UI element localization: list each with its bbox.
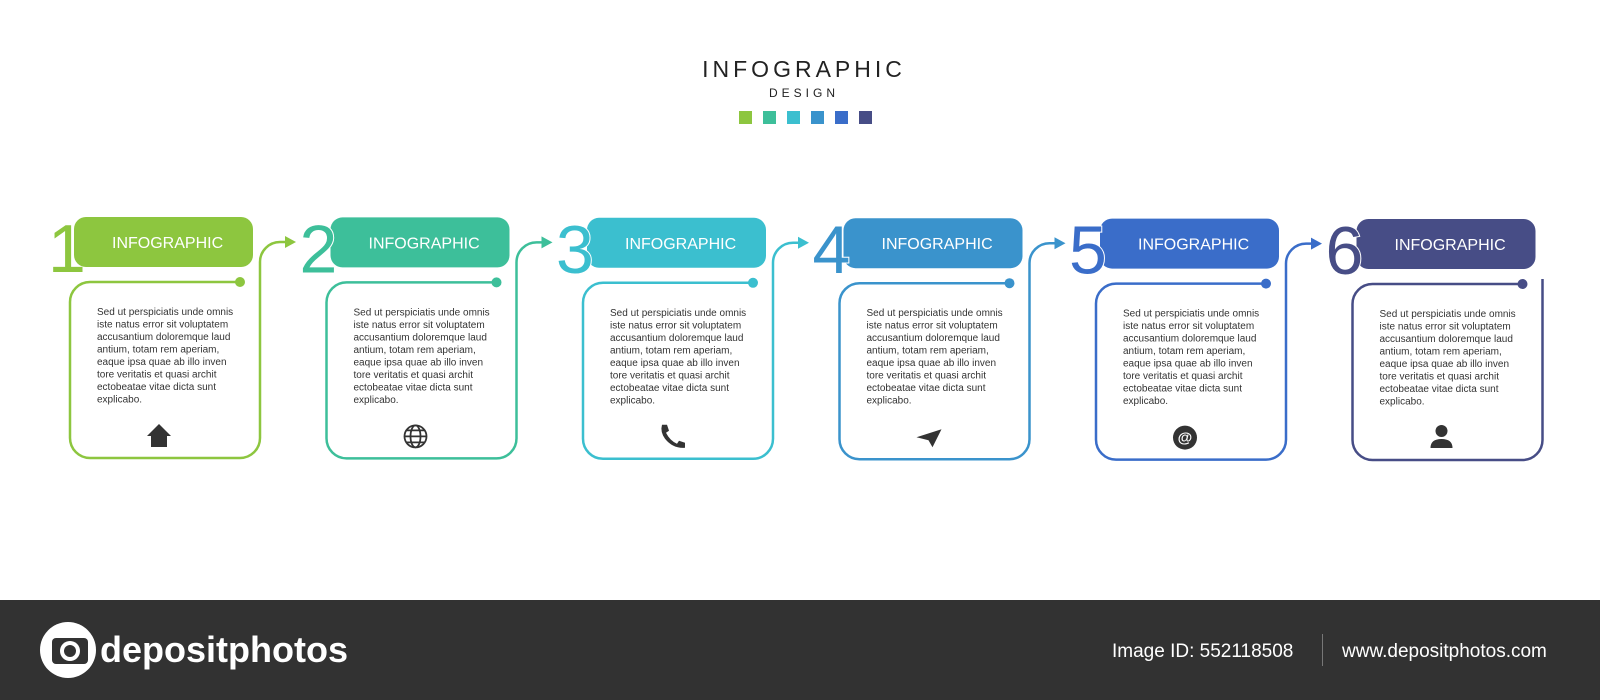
title: [702, 56, 906, 124]
step 4: INFOGRAPHIC: [882, 236, 993, 253]
logo: depositphotos: [100, 629, 348, 670]
footer band: [0, 600, 1600, 700]
step 2: INFOGRAPHIC: [368, 235, 480, 252]
step 4: [812, 212, 1066, 459]
step 1: 1: [48, 211, 86, 287]
step 3: 3: [556, 212, 594, 288]
step 5: [1069, 213, 1322, 460]
footer band: www.depositphotos.com: [1341, 641, 1547, 662]
logo: [40, 622, 348, 678]
icon: at sign: [1173, 426, 1197, 450]
image id: Image ID: 552118508: [1112, 641, 1293, 662]
title: INFOGRAPHIC: [702, 56, 906, 82]
step 1: INFOGRAPHIC: [112, 235, 223, 252]
step 3: INFOGRAPHIC: [625, 236, 736, 253]
icon: globe: [404, 425, 426, 447]
icon: home: [147, 424, 171, 447]
icon: user: [1430, 425, 1452, 448]
step 6: [1326, 213, 1542, 460]
step 5: 5: [1069, 213, 1107, 289]
icon: at sign: @: [1178, 430, 1192, 447]
step 2: [300, 211, 552, 458]
icon: phone: [661, 425, 685, 448]
step 6: INFOGRAPHIC: [1394, 237, 1506, 254]
step 5: INFOGRAPHIC: [1138, 237, 1249, 254]
icon: paper plane: [916, 429, 942, 447]
step 4: 4: [812, 212, 850, 288]
step 1: [48, 211, 296, 458]
step 6: 6: [1326, 213, 1363, 289]
step 2: 2: [300, 211, 337, 287]
title: DESIGN: [769, 86, 839, 100]
step 3: [556, 212, 809, 459]
